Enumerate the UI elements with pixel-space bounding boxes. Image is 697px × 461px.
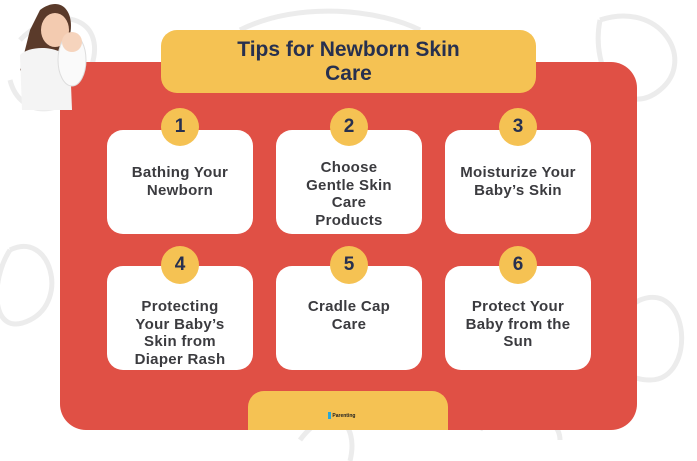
card 6: Sun xyxy=(503,333,533,350)
title: Tips for Newborn Skin xyxy=(237,38,460,61)
card 4: Skin from xyxy=(144,333,216,350)
card 5 xyxy=(276,266,422,370)
card 2: Choose xyxy=(321,159,377,176)
number 2: 2 xyxy=(344,116,354,137)
card 4: Your Baby’s xyxy=(135,316,225,332)
card 3 xyxy=(445,130,591,234)
card 6: Baby from the xyxy=(466,316,570,332)
logo: Parenting xyxy=(332,413,355,419)
footer tab with logo xyxy=(248,391,448,430)
card 6 xyxy=(445,266,591,370)
card 4: Protecting xyxy=(141,298,219,315)
card 4: Diaper Rash xyxy=(135,350,225,368)
number 5 xyxy=(330,246,368,284)
title xyxy=(161,30,536,93)
number 6 xyxy=(499,246,537,284)
number 3: 3 xyxy=(513,116,523,137)
title: Care xyxy=(325,62,372,85)
card 6: Protect Your xyxy=(472,298,564,315)
card 1: Newborn xyxy=(147,182,213,198)
number 6: 6 xyxy=(513,254,523,275)
number 5: 5 xyxy=(344,254,354,275)
card 1: Bathing Your xyxy=(132,164,228,181)
number 1 xyxy=(161,108,199,146)
number 2 xyxy=(330,108,368,146)
card 5: Care xyxy=(332,316,366,332)
card 2 xyxy=(276,130,422,234)
illustration: mother and baby xyxy=(20,4,86,110)
number 3 xyxy=(499,108,537,146)
number 4: 4 xyxy=(175,254,185,275)
number 1: 1 xyxy=(175,116,185,137)
red panel xyxy=(60,62,637,430)
card 3: Baby’s Skin xyxy=(474,182,562,198)
card 4 xyxy=(107,266,253,370)
card 3: Moisturize Your xyxy=(460,164,576,181)
number 4 xyxy=(161,246,199,284)
card 2: Care xyxy=(332,194,366,211)
card 2: Gentle Skin xyxy=(306,176,392,194)
card 5: Cradle Cap xyxy=(308,298,390,315)
card 1 xyxy=(107,130,253,234)
card 2: Products xyxy=(315,212,383,228)
